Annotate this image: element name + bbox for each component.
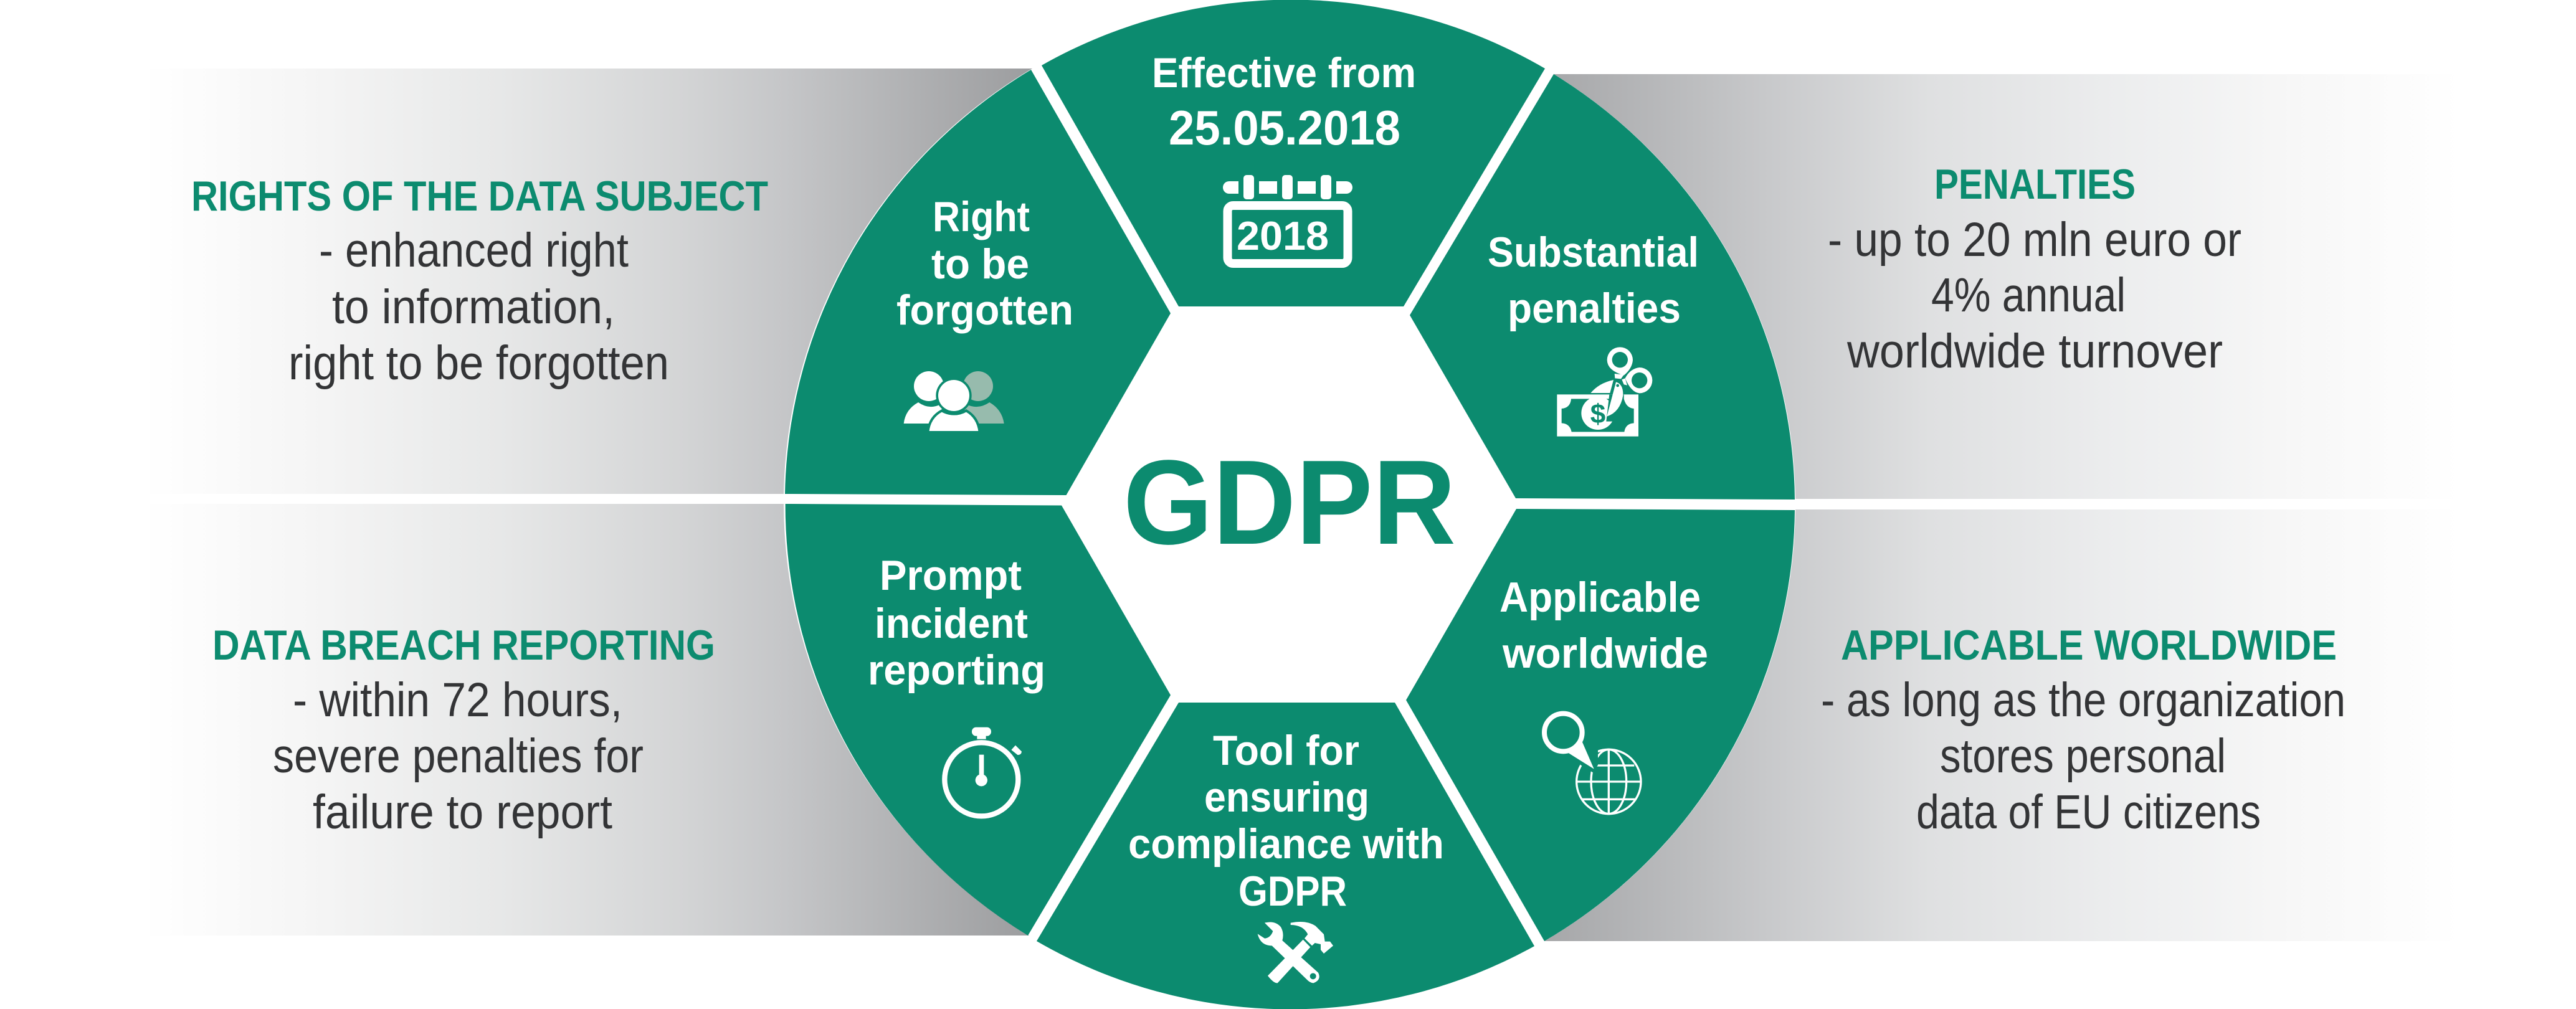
text block: data breach reporting: - within 72 hours, (293, 673, 622, 727)
title: GDPR: GDPR (1123, 435, 1456, 569)
panel background: applicable worldwide (1544, 509, 2461, 941)
text block: data breach reporting: failure to report (313, 785, 612, 839)
segment: right to be forgotten (785, 70, 1171, 495)
segment: applicable worldwide (1406, 509, 1795, 941)
text block: rights of the data subject: RIGHTS OF THE DATA SUBJECT (191, 173, 768, 220)
text block: applicable worldwide: stores personal (1940, 729, 2226, 783)
label: tool for ensuring compliance with GDPR (1128, 727, 1444, 915)
text block: applicable worldwide: data of EU citizens (1916, 785, 2261, 839)
label: tool for ensuring compliance with GDPR: compliance with (1128, 820, 1444, 868)
label: substantial penalties: penalties (1508, 285, 1681, 332)
label: substantial penalties: Substantial (1488, 229, 1699, 276)
text block: applicable worldwide: - as long as the organization (1821, 673, 2345, 727)
label: prompt incident reporting: incident (875, 600, 1028, 647)
text block: rights of the data subject (191, 173, 768, 390)
label: effective from date: Effective from (1152, 49, 1416, 97)
label: right to be forgotten: to be (931, 240, 1029, 288)
panel background: penalties (1554, 74, 2461, 499)
panel background: rights of the data subject (93, 69, 1032, 494)
icon: group of people (904, 371, 1004, 432)
text block: data breach reporting (212, 622, 715, 839)
text block: rights of the data subject: - enhanced right (319, 224, 629, 277)
icon: calendar 2018 (1223, 175, 1352, 263)
icon: stopwatch (944, 727, 1022, 816)
segment: effective from (1042, 0, 1545, 306)
text block: penalties: - up to 20 mln euro or (1828, 213, 2241, 267)
label: effective from date: 25.05.2018 (1169, 100, 1400, 155)
icon: scissors cutting banknote (1557, 347, 1652, 437)
icon: magnifier over globe (1544, 714, 1641, 814)
text block: penalties: PENALTIES (1934, 161, 2136, 208)
label: tool for ensuring compliance with GDPR: GDPR (1238, 868, 1347, 915)
label: applicable worldwide: Applicable (1499, 574, 1701, 621)
icon: calendar 2018: 2018 (1237, 213, 1329, 258)
text block: data breach reporting: severe penalties for (273, 729, 644, 783)
text block: penalties: worldwide turnover (1846, 324, 2223, 378)
text block: penalties (1828, 161, 2241, 378)
segment: prompt incident reporting (786, 504, 1171, 936)
label: right to be forgotten: Right (933, 193, 1030, 240)
label: prompt incident reporting: reporting (868, 647, 1045, 694)
label: prompt incident reporting: Prompt (880, 552, 1022, 599)
text block: applicable worldwide (1821, 622, 2345, 839)
icon: wrench and hammer (1258, 922, 1333, 983)
text block: penalties: 4% annual (1931, 268, 2126, 322)
label: tool for ensuring compliance with GDPR: Tool for (1213, 727, 1359, 774)
segment: substantial penalties (1410, 74, 1795, 500)
segment: tool for ensuring compliance (1037, 703, 1534, 1009)
label: right to be forgotten: forgotten (896, 287, 1073, 334)
label: applicable worldwide (1499, 574, 1708, 677)
label: tool for ensuring compliance with GDPR: ensuring (1204, 774, 1369, 821)
panel background: data breach reporting (93, 504, 1029, 936)
text block: rights of the data subject: right to be forgotten (288, 336, 669, 390)
text block: applicable worldwide: APPLICABLE WORLDWIDE (1841, 622, 2337, 669)
text block: rights of the data subject: to information, (332, 280, 615, 334)
icon: scissors cutting banknote: $ (1590, 399, 1605, 429)
label: right to be forgotten (896, 193, 1073, 334)
text block: data breach reporting: DATA BREACH REPORTING (212, 622, 715, 669)
label: prompt incident reporting (868, 552, 1045, 694)
label: effective from date (1152, 49, 1416, 155)
label: substantial penalties (1488, 229, 1699, 332)
label: applicable worldwide: worldwide (1502, 630, 1708, 677)
